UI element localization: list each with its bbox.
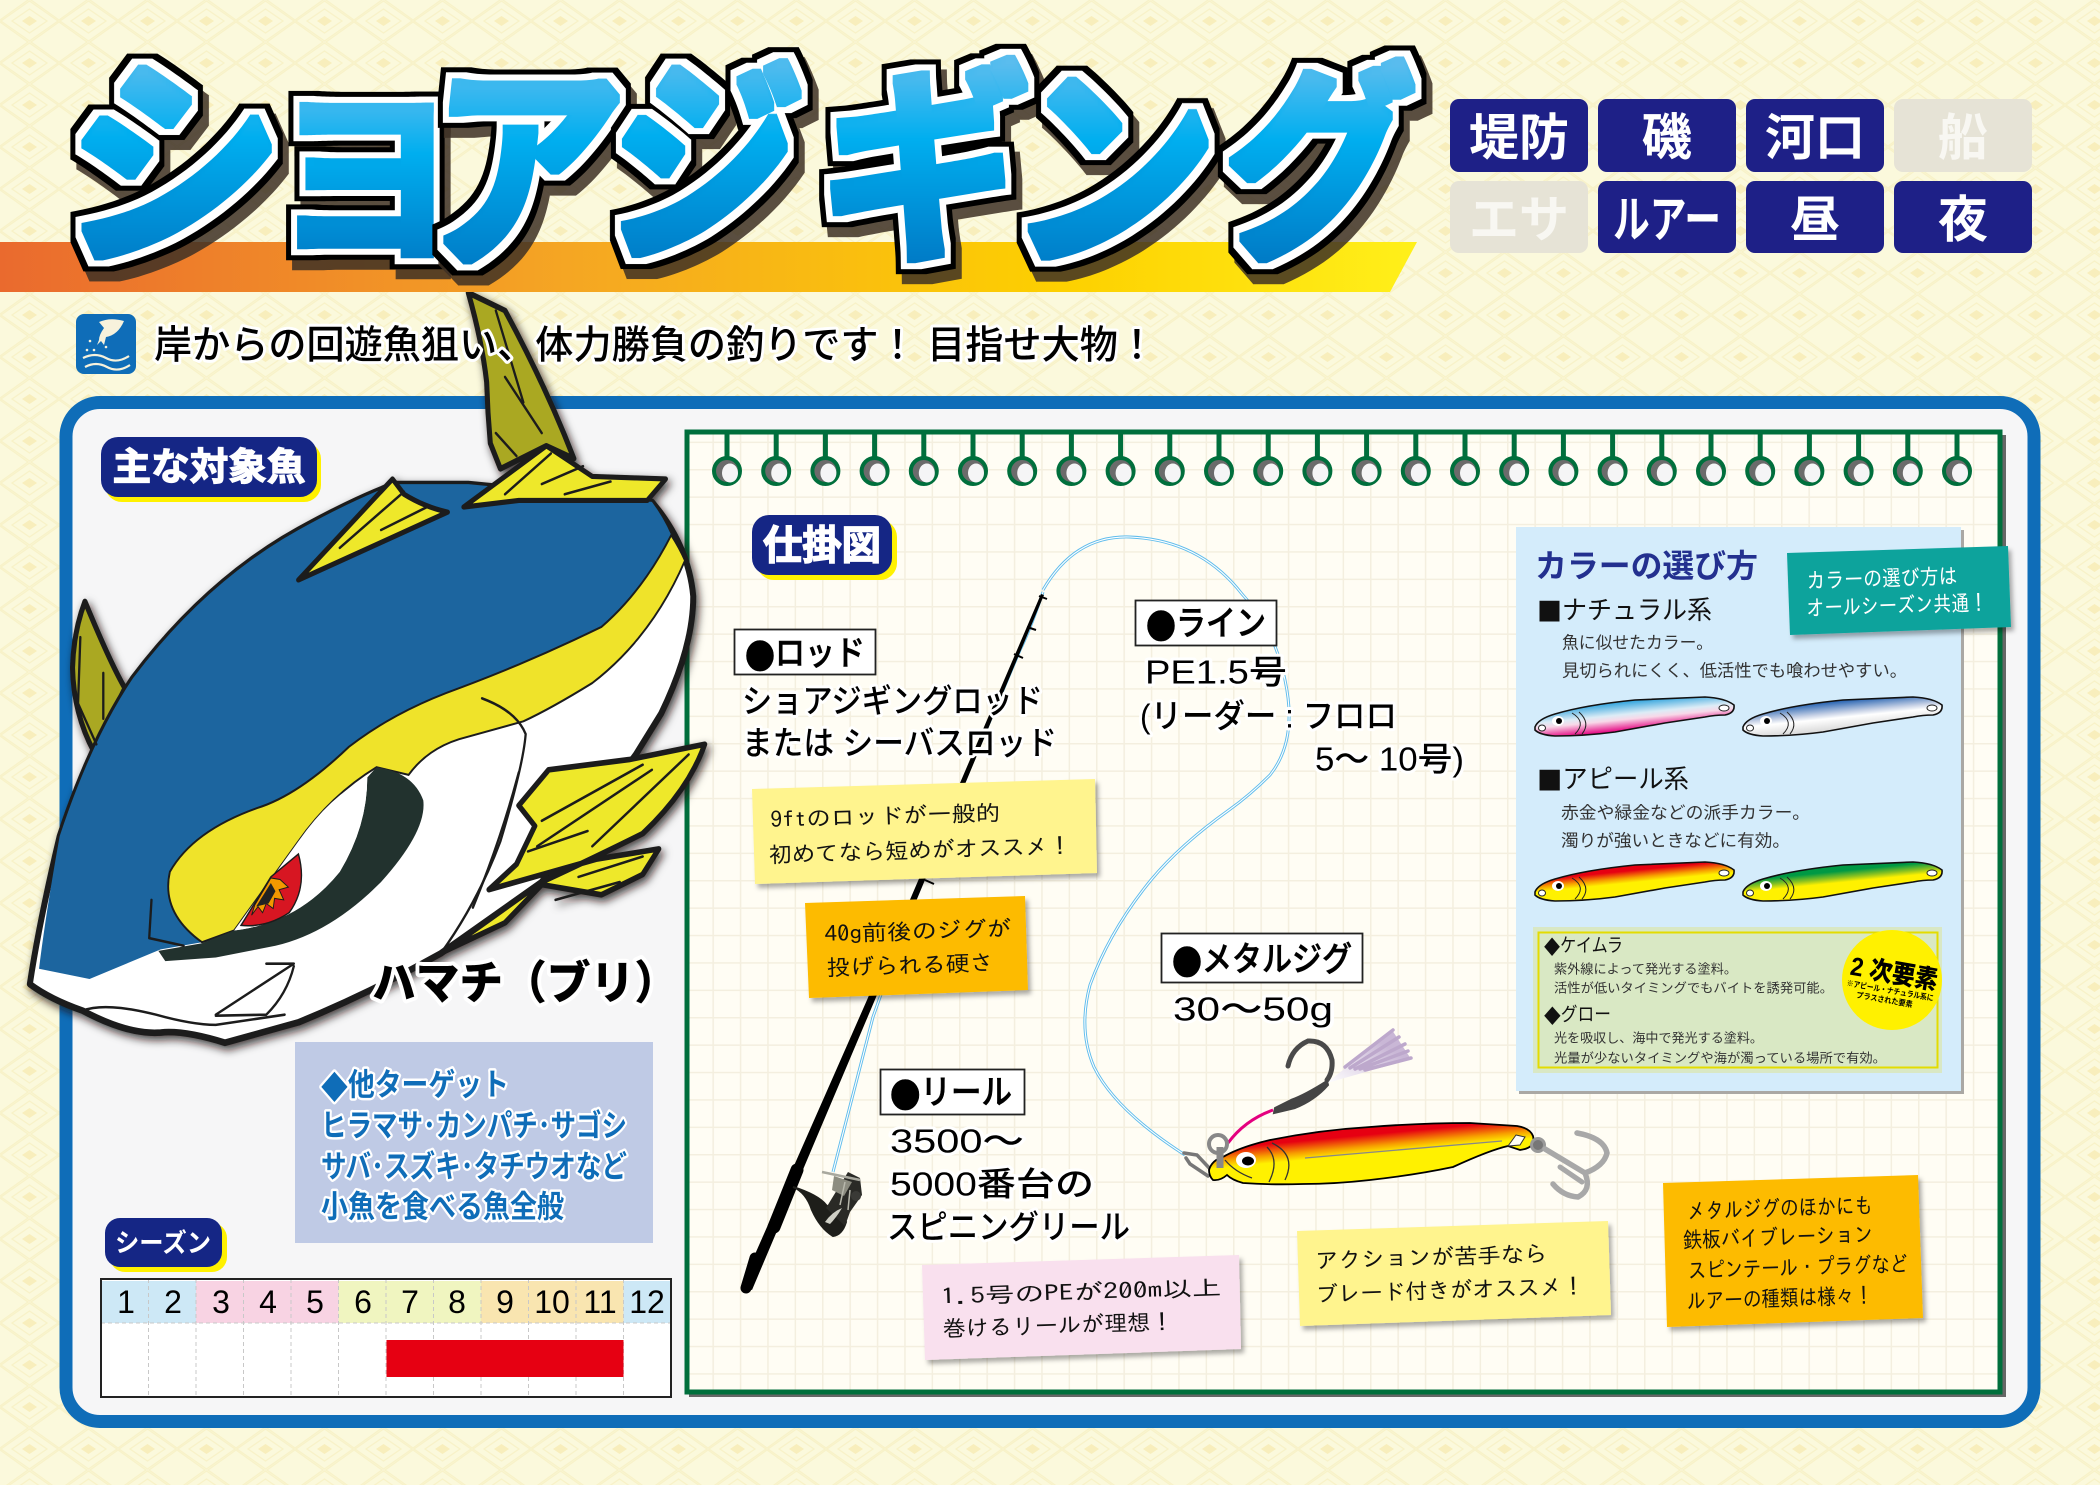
illustration: yellowtail fish [30, 293, 705, 1043]
appeal jig: green gold [1743, 862, 1942, 901]
label: reel: ●リール [890, 1068, 1012, 1118]
badge: season [105, 1218, 227, 1272]
secondary elements box: 光を吸収し、海中で発光する塗料。 [1554, 1030, 1763, 1046]
sticky note: reel capacity [922, 1255, 1241, 1360]
band: title underlay [0, 242, 1417, 292]
natural jig: blue pink [1535, 697, 1734, 736]
tag: night: 夜 [1938, 192, 1988, 248]
jig body [1209, 1123, 1533, 1184]
text: jig weight: 30〜50g [1173, 990, 1333, 1028]
sticky note: other lures: 鉄板バイブレーション [1683, 1223, 1873, 1251]
season chart: 12 [629, 1284, 665, 1320]
pectoral fin [445, 744, 705, 951]
dorsal tall fin [468, 293, 574, 469]
season chart: 6 [354, 1284, 372, 1320]
text: rod description [742, 682, 1057, 762]
tail fin left [73, 601, 125, 752]
badge: season: シーズン [115, 1228, 211, 1258]
season chart: 1 [117, 1284, 135, 1320]
other targets box [295, 1042, 653, 1243]
feather [1327, 1030, 1411, 1083]
text: rod description: ショアジギングロッド [742, 682, 1043, 720]
season chart: 5 [306, 1284, 324, 1320]
text: reel description: 3500〜 [890, 1122, 1024, 1160]
metal jig with hooks [1184, 1030, 1607, 1197]
natural section [1537, 592, 1907, 680]
sticky note: blade jig: ブレード付きがオススメ！ [1315, 1275, 1585, 1305]
sticky note: rod length: 9ftのロッドが一般的 [770, 801, 1000, 831]
badge: rig diagram heading: 仕掛図 [763, 524, 881, 568]
natural section: ■ナチュラル系 [1537, 592, 1712, 628]
natural section: 魚に似せたカラー。 [1562, 634, 1713, 652]
tag: night [1894, 181, 2032, 253]
secondary elements box [1533, 927, 1942, 1073]
sticky note: colour choice [1787, 546, 2011, 635]
text: rod description: または シーバスロッド [742, 724, 1057, 762]
label: line: ●ライン [1146, 600, 1266, 648]
title: shore jigging: ギ [806, 0, 1042, 303]
season chart: 8 [448, 1284, 466, 1320]
label: rod: ●ロッド [745, 630, 865, 678]
tag: bait (inactive): エサ [1469, 192, 1569, 248]
badge: main target fish: 主な対象魚 [112, 447, 306, 489]
tag: estuary: 河口 [1765, 110, 1865, 166]
fish name label: ハマチ（ブリ） [372, 957, 678, 1009]
jig rings [1209, 1135, 1227, 1168]
tag: lure: ルアー [1613, 192, 1721, 248]
other targets box: ◆他ターゲット [321, 1062, 509, 1108]
tag: breakwater [1450, 99, 1588, 172]
fishing line [833, 537, 1289, 1172]
badge: secondary elements [1842, 930, 1942, 1030]
tag: estuary [1746, 99, 1884, 172]
sticky note: reel capacity: 巻けるリールが理想！ [942, 1310, 1174, 1340]
panel: notebook [687, 431, 2006, 1397]
eye white [234, 777, 367, 931]
season chart: 4 [259, 1284, 277, 1320]
badge: secondary elements: 2 次要素 [1848, 951, 1940, 996]
tag: breakwater: 堤防 [1469, 110, 1569, 166]
treble hook [1532, 1133, 1607, 1197]
badge: secondary elements: プラスされた要素 [1856, 990, 1913, 1009]
secondary elements box: 活性が低いタイミングでもバイトを誘発可能。 [1554, 980, 1833, 996]
text: line description [1140, 654, 1464, 778]
secondary elements box: ◆グロー [1544, 1002, 1611, 1028]
dorsal yellow fin 1 [298, 479, 448, 580]
jig faces [1538, 705, 1937, 899]
tag: rocks: 磯 [1642, 110, 1692, 166]
season chart: 11 [583, 1284, 617, 1320]
text: line description: PE1.5号 [1145, 654, 1287, 690]
sticky note: other lures: ルアーの種類は様々！ [1687, 1284, 1873, 1312]
body [30, 484, 693, 1043]
text: reel description: スピニングリール [887, 1208, 1130, 1246]
sticky note: colour choice: オールシーズン共通！ [1806, 591, 1988, 619]
icon: leaping fish [76, 314, 136, 374]
iris [241, 854, 301, 926]
natural section: 見切られにくく、低活性でも喰わせやすい。 [1562, 662, 1907, 680]
season chart: 10 [534, 1284, 570, 1320]
secondary elements box: 紫外線によって発光する塗料。 [1554, 962, 1737, 976]
season bar: July to November [386, 1340, 624, 1377]
sticky note: reel capacity: 1.5号のPEが200m以上 [940, 1277, 1222, 1307]
notebook rings [714, 431, 1970, 484]
sticky note: rod length: 初めてなら短めがオススメ！ [768, 834, 1072, 866]
sticky note: colour choice: カラーの選び方は [1806, 565, 1958, 591]
season chart: 2 [164, 1284, 182, 1320]
sticky note: blade jig: アクションが苦手なら [1315, 1242, 1547, 1272]
sticky note: rod length [752, 779, 1097, 884]
title: shore jigging: ア [410, 0, 636, 312]
panel: main blue frame [66, 402, 2034, 1422]
season chart: 7 [401, 1284, 419, 1320]
tag: bait (inactive) [1450, 181, 1588, 253]
appeal section: ■アピール系 [1537, 760, 1689, 798]
appeal jig: red gold [1535, 862, 1734, 901]
sticky note: rod hardness: 40g前後のジグが [824, 917, 1012, 945]
appeal section [1537, 760, 1810, 850]
label: metal jig: ●メタルジグ [1172, 936, 1352, 984]
sticky note: other lures: スピンテール・プラグなど [1688, 1253, 1908, 1281]
season chart [101, 1279, 671, 1397]
secondary elements box: ◆ケイムラ [1544, 932, 1623, 960]
season chart: 9 [496, 1284, 514, 1320]
natural jig: blue silver [1743, 697, 1942, 736]
badge: rig diagram heading [752, 515, 897, 580]
sticky note: blade jig [1297, 1221, 1611, 1326]
text: line description: (リーダー : フロロ [1140, 698, 1397, 734]
category tags [1450, 99, 2032, 253]
tag: boat (inactive) [1894, 99, 2032, 172]
jig eye [1236, 1152, 1256, 1168]
fish line details [78, 311, 689, 1025]
swivel [1184, 1153, 1213, 1176]
tag: daytime [1746, 181, 1884, 253]
reel [793, 1172, 862, 1236]
sticky note: other lures: メタルジグのほかにも [1687, 1194, 1873, 1222]
text: line description: 5〜 10号) [1315, 740, 1464, 778]
tag: daytime: 昼 [1790, 192, 1840, 248]
assist hook [1228, 1041, 1332, 1143]
other targets box: サバ･スズキ･タチウオなど [321, 1150, 627, 1184]
subtitle: 岸からの回遊魚狙い、体力勝負の釣りです！ 目指せ大物！ [154, 324, 1156, 368]
other targets box: 小魚を食べる魚全般 [321, 1190, 564, 1224]
eye dark surround [158, 767, 424, 961]
appeal section: 赤金や緑金などの派手カラー。 [1561, 804, 1810, 822]
sticky note: rod hardness: 投げられる硬さ [826, 951, 994, 979]
sticky note: rod hardness [805, 896, 1028, 998]
badge: main target fish [101, 437, 321, 502]
text: reel description: 5000番台の [890, 1166, 1094, 1202]
rod [741, 594, 1047, 1290]
title: shore jigging: ヨ [275, 22, 457, 304]
dorsal yellow fin 2 [464, 446, 666, 507]
tag: boat (inactive): 船 [1938, 110, 1988, 166]
tag: rocks [1598, 99, 1736, 172]
sticky note: other lures [1663, 1175, 1923, 1327]
appeal section: 濁りが強いときなどに有効。 [1561, 832, 1790, 850]
yellow stripe [168, 535, 685, 942]
title: shore jigging [50, 0, 1425, 312]
text: reel description [887, 1122, 1130, 1246]
badge: secondary elements: ※アピール・ナチュラル系に [1846, 978, 1934, 1003]
blue back [39, 484, 671, 979]
colour heading: カラーの選び方 [1535, 548, 1758, 584]
tag: lure [1598, 181, 1736, 253]
title: shore jigging: グ [1211, 0, 1425, 301]
other targets box: ヒラマサ･カンパチ･サゴシ [321, 1108, 627, 1144]
title: shore jigging: ン [1000, 0, 1232, 312]
season chart: 3 [212, 1284, 230, 1320]
secondary elements box: 光量が少ないタイミングや海が濁っている場所で有効。 [1554, 1050, 1886, 1066]
panel: how to choose colours [1516, 527, 1964, 1094]
